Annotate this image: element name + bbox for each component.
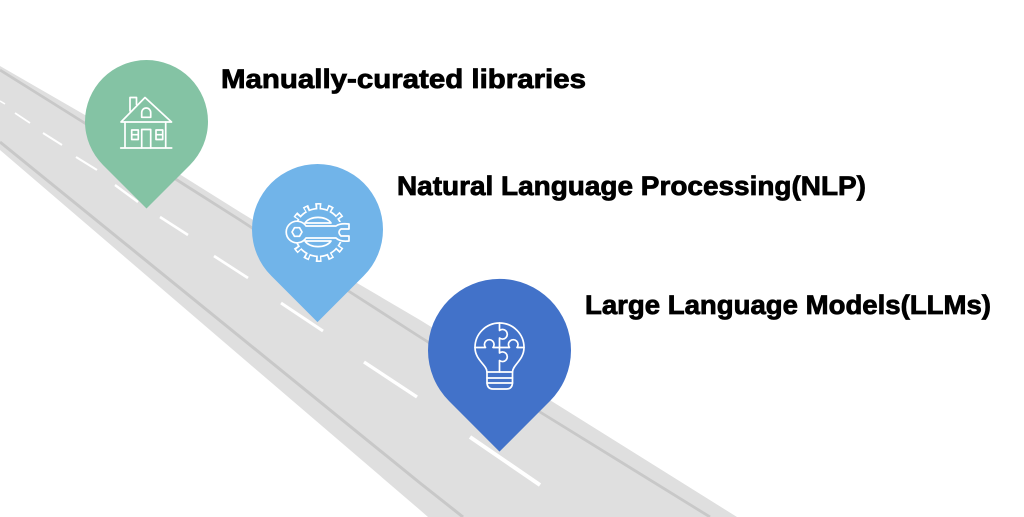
heading: large language models: Large Language Models(LLMs) [585,290,991,320]
icon: puzzle light bulb [475,323,524,389]
pin: natural language processing [252,164,383,322]
pin: large language models [428,279,571,452]
pin: manually-curated libraries [85,60,208,208]
heading: natural language processing: Natural Language Processing(NLP) [397,171,866,201]
icon: gear and wrench [284,203,351,262]
heading: manually-curated libraries: Manually-curated libraries [221,64,586,94]
road centre dashes [0,101,540,485]
icon: house [121,98,172,148]
road [0,66,737,517]
